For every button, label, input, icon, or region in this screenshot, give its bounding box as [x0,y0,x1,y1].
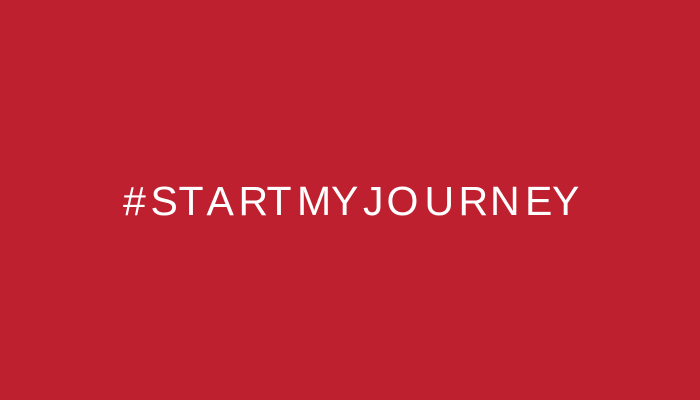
title: hashtag: #STARTMYJOURNEY [123,178,579,224]
